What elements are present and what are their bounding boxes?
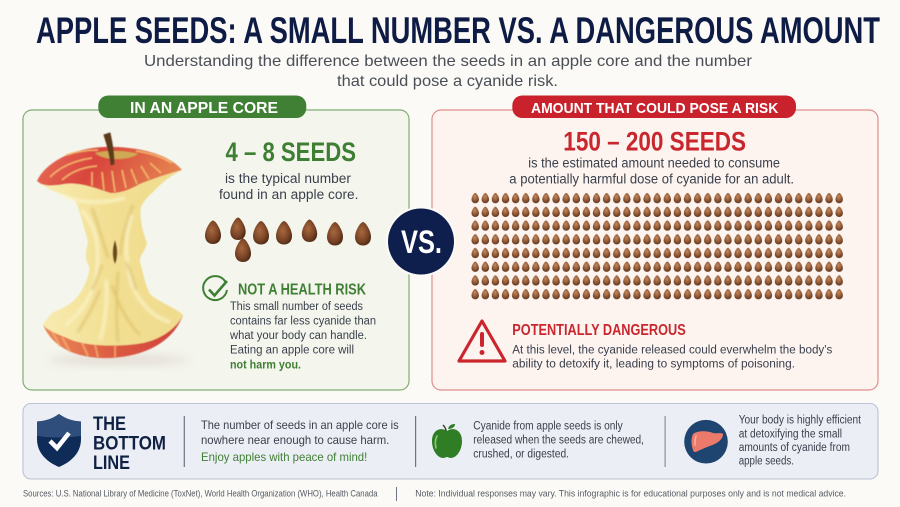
text: not a health risk explanation xyxy=(229,301,376,371)
vs badge xyxy=(386,206,456,276)
text: not a health risk explanation: what your body can handle. xyxy=(229,330,367,342)
heading: the bottom line: THE xyxy=(93,414,126,435)
description: estimated amount xyxy=(509,156,794,186)
icon: liver xyxy=(684,420,728,464)
text: cyanide released when chewed: Cyanide from apple seeds is only xyxy=(473,420,623,432)
description: typical number: found in an apple core. xyxy=(219,187,358,202)
icon: green check xyxy=(203,276,227,300)
text: seeds not enough to cause harm xyxy=(201,418,399,464)
heading: potentially dangerous: POTENTIALLY DANGEROUS xyxy=(512,322,686,339)
text: danger explanation xyxy=(512,344,833,371)
text: seeds not enough to cause harm: Enjoy apples with peace of mind! xyxy=(201,450,367,464)
heading pill: in an apple core: IN AN APPLE CORE xyxy=(130,100,278,117)
text: body detoxifies efficiently: at detoxifying the small xyxy=(739,428,842,440)
text: not a health risk explanation: not harm you. xyxy=(230,359,301,371)
panel: the bottom line xyxy=(23,404,878,479)
text: danger explanation: At this level, the cyanide released could everwhelm the body's xyxy=(512,344,833,356)
heading: the bottom line xyxy=(93,414,166,474)
text: not a health risk explanation: This small number of seeds xyxy=(230,301,363,313)
text: not a health risk explanation: Eating an apple core will xyxy=(230,345,354,357)
icon: warning triangle xyxy=(459,321,505,361)
panel: amount that could pose a risk xyxy=(432,96,878,390)
heading: the bottom line: LINE xyxy=(93,453,130,474)
text: cyanide released when chewed xyxy=(473,420,644,461)
vs badge: VS. xyxy=(401,224,442,260)
text: not a health risk explanation: contains far less cyanide than xyxy=(230,316,376,328)
icon: green apple xyxy=(432,424,462,458)
text: body detoxifies efficiently: apple seeds. xyxy=(739,456,794,468)
eight apple seeds xyxy=(205,217,371,262)
text: danger explanation: ability to detoxify it, leading to symptoms of poisoning. xyxy=(512,359,795,371)
text: cyanide released when chewed: crushed, or digested. xyxy=(473,449,569,461)
panel: in an apple core xyxy=(23,96,409,390)
description: estimated amount: is the estimated amount needed to consume xyxy=(528,156,780,171)
apple core illustration xyxy=(37,133,190,364)
text: body detoxifies efficiently: Your body is highly efficient xyxy=(739,415,862,427)
heading: the bottom line: BOTTOM xyxy=(93,434,166,454)
subtitle: Understanding the difference between the seeds in an apple core and the number xyxy=(144,53,753,70)
text: cyanide released when chewed: released when the seeds are chewed, xyxy=(473,435,644,447)
subtitle xyxy=(144,53,753,90)
text: seeds not enough to cause harm: The number of seeds in an apple core is xyxy=(201,418,399,432)
seed count: 4 to 8 seeds: 4 – 8 SEEDS xyxy=(226,137,356,167)
heading pill: amount that could pose a risk: AMOUNT THAT COULD POSE A RISK xyxy=(531,100,778,117)
text: seeds not enough to cause harm: nowhere near enough to cause harm. xyxy=(201,433,389,447)
heading pill: in an apple core xyxy=(98,96,306,118)
description: typical number xyxy=(219,171,358,202)
text: body detoxifies efficiently xyxy=(739,415,862,468)
seed grid: many apple seeds xyxy=(470,191,844,301)
footer note: Note: Individual responses may vary. This infographic is for educational purposes only and is not medical advice. xyxy=(415,488,846,498)
heading: not a health risk: NOT A HEALTH RISK xyxy=(238,281,367,298)
seed count: 150 to 200 seeds: 150 – 200 SEEDS xyxy=(563,127,746,157)
footer sources: Sources: U.S. National Library of Medicine (ToxNet), World Health Organization (WHO), Health Canada xyxy=(23,488,378,498)
subtitle: that could pose a cyanide risk. xyxy=(337,73,558,90)
text: body detoxifies efficiently: amounts of cyanide from xyxy=(739,442,850,454)
description: typical number: is the typical number xyxy=(225,171,352,186)
icon: shield with check xyxy=(37,414,81,467)
description: estimated amount: a potentially harmful dose of cyanide for an adult. xyxy=(509,171,794,186)
